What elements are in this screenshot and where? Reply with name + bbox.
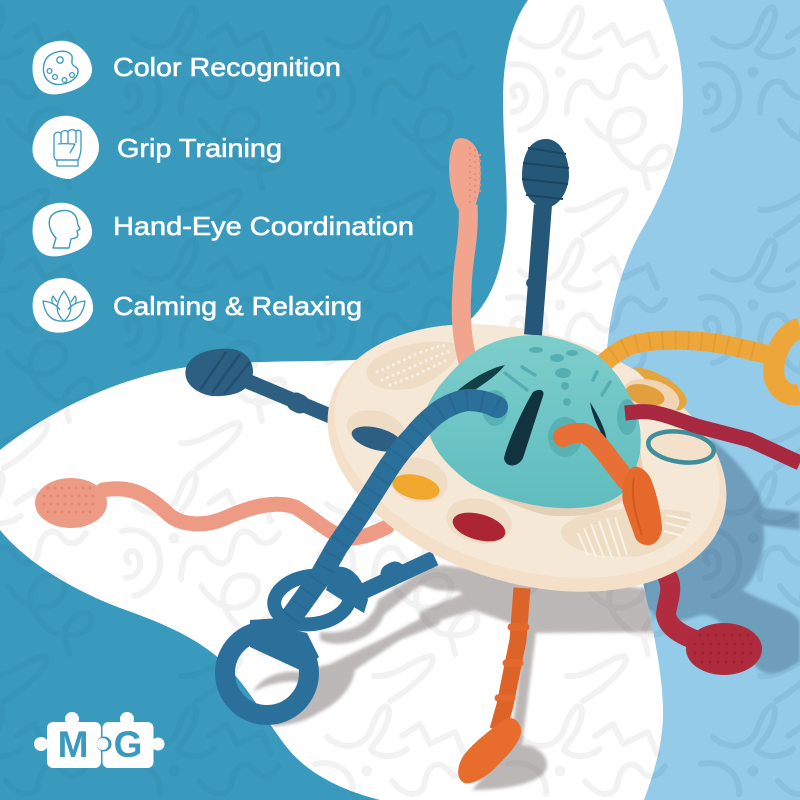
hole red (442, 493, 516, 549)
dome shadow on saucer (425, 420, 645, 516)
benefit: hand-eye coordination (32, 203, 414, 256)
strap: yellow (603, 328, 800, 395)
benefit list (32, 41, 414, 333)
strap: pink top (449, 138, 481, 362)
benefit: grip training (32, 116, 282, 179)
textured pad top (366, 342, 460, 390)
dome (426, 335, 641, 508)
puzzle piece G (96, 712, 164, 768)
logo letter M: M (58, 724, 88, 765)
strap: red bottom paddle (666, 578, 762, 675)
textured pad bottom (561, 509, 691, 558)
icon: palette (32, 41, 92, 94)
label: grip training: Grip Training (117, 133, 282, 163)
squiggle pattern on light blue (609, 4, 800, 797)
label: color recognition: Color Recognition (113, 52, 341, 82)
hole navy (342, 404, 410, 456)
label: hand-eye coordination: Hand-Eye Coordination (113, 211, 414, 241)
puzzle piece M (34, 712, 101, 768)
squiggle pattern on teal (777, 339, 800, 455)
strap: blue tube with ring (225, 400, 497, 715)
strap: second blue ring (271, 558, 435, 629)
hole teal ring (646, 428, 716, 466)
icon: lotus (33, 278, 93, 333)
background: light blue right field (600, 0, 800, 800)
label: calming and relaxing: Calming & Relaxing (113, 291, 362, 321)
toy: sensory pull toy (35, 138, 800, 783)
benefit: color recognition (32, 41, 341, 94)
strap: navy left paddle (185, 349, 335, 418)
icon: head profile (32, 203, 92, 256)
strap: navy top (522, 139, 569, 335)
saucer base (294, 279, 760, 637)
strap: orange down (458, 588, 526, 783)
strap: orange short (563, 433, 662, 545)
logo: MG puzzle (34, 712, 164, 768)
toy shadow on light blue (630, 440, 800, 673)
benefit: calming and relaxing (33, 278, 362, 333)
strap: pink left paddle (35, 478, 387, 538)
logo letter G: G (114, 724, 142, 765)
hole amber (619, 367, 687, 421)
strap: crimson (625, 412, 800, 463)
hole yellow (383, 451, 453, 509)
toy shadows on white (253, 565, 660, 790)
icon: fist (32, 116, 99, 179)
background: teal left field (0, 0, 600, 800)
